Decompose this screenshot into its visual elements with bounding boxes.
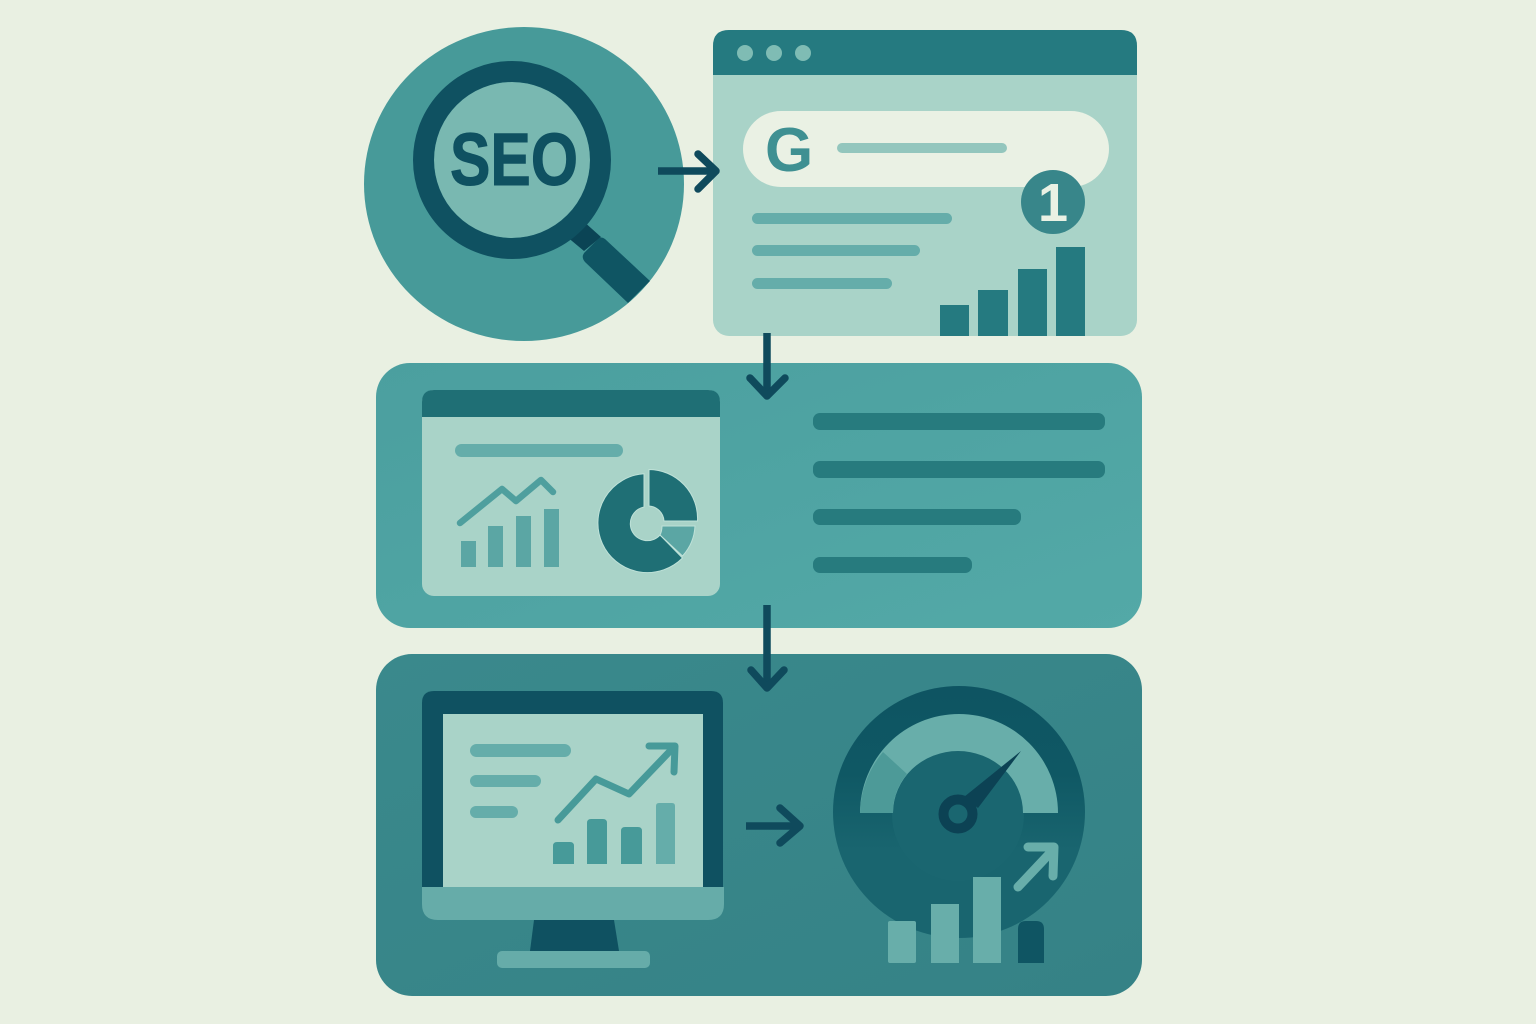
screen bar chart [553,803,675,864]
arrow: monitor to gauge [746,808,800,843]
dashboard title bar [422,390,720,417]
panel: performance [376,654,1142,996]
screen text lines [470,744,571,818]
gauge bar chart [888,877,1044,963]
icon: desktop monitor [422,691,724,968]
trend arrow [558,746,675,820]
icon: speed gauge [833,686,1085,963]
result lines [752,213,952,289]
monitor stand [530,920,619,951]
arrow: analytics to performance [751,605,784,688]
panel: search results browser window [713,30,1137,336]
rank badge [1021,170,1085,234]
bar chart [461,509,559,567]
dashboard heading line [455,444,623,457]
search bar [743,111,1109,187]
panel: analytics [376,363,1142,628]
icon: G logo: G [765,116,813,185]
gauge arc low segment [860,752,907,813]
analytics dashboard window [422,390,720,596]
icon: magnifying glass [424,72,650,303]
gauge arc [860,714,1058,813]
gauge needle [944,751,1021,828]
window control dots [737,45,811,61]
monitor bezel [422,887,724,920]
growth arrow [1018,847,1054,887]
browser title bar [713,30,1137,75]
text lines [813,413,1105,573]
arrow: SEO to search results [658,154,716,189]
rank badge: 1 [1038,173,1068,233]
monitor base [497,951,650,968]
line chart [460,480,553,523]
bar chart: rising rank [940,247,1085,336]
donut chart [598,470,698,573]
panel: SEO magnifier circle [364,27,684,341]
arrow: search results to analytics [750,333,785,396]
gauge inner dial [892,749,1024,881]
heading: SEO: SEO [450,118,578,201]
monitor screen [443,714,703,887]
